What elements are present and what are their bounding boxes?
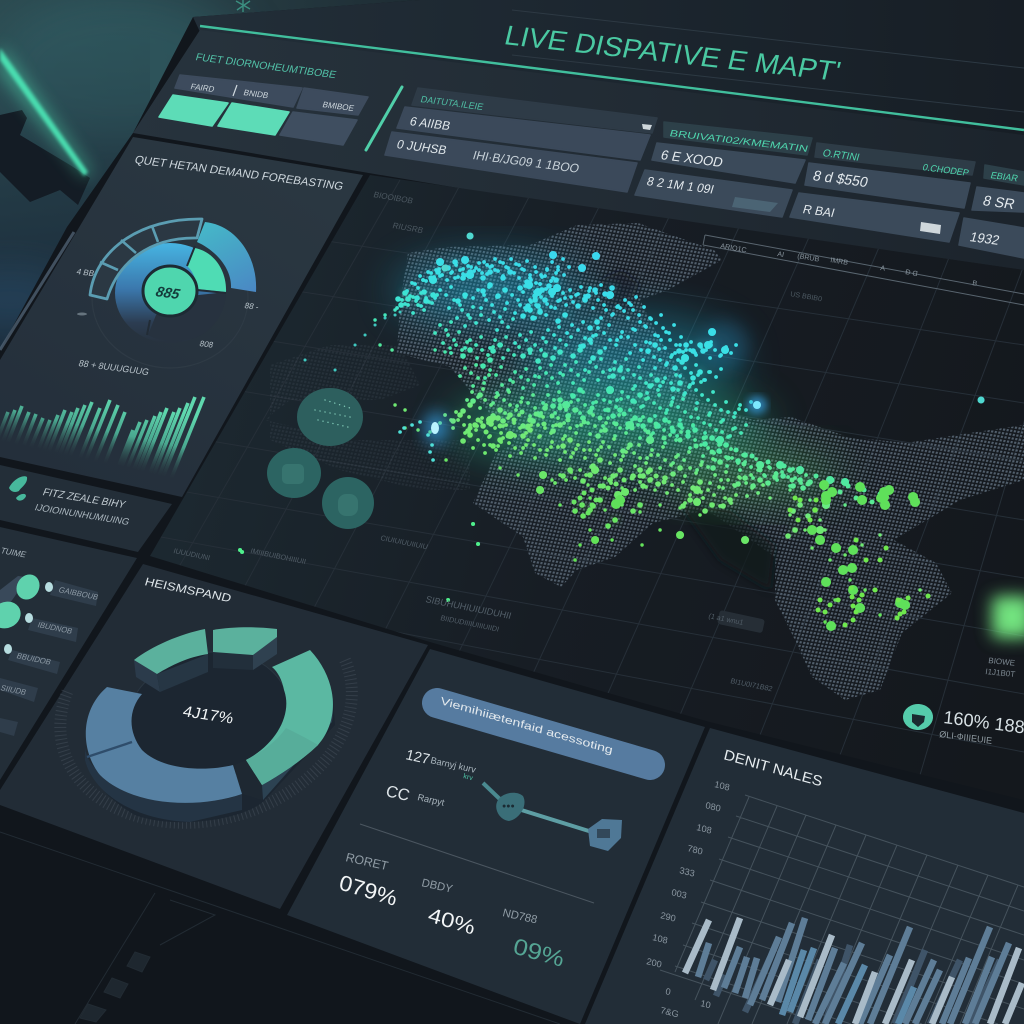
- panel heading: QUET HETAN DEMAND FOREBASTING: [133, 154, 345, 193]
- panel: small alert: [0, 465, 172, 552]
- y axis labels: 333: [679, 865, 696, 879]
- route connector: krv: [463, 772, 474, 782]
- scatter of dispatch points: [240, 236, 981, 626]
- gauge chart: 88 + 8UUUGUUG: [77, 358, 150, 377]
- lower floor network: [0, 832, 560, 1024]
- donut chart: [60, 627, 352, 823]
- metric: roret: [337, 850, 400, 911]
- data card grid: O.RTINI: [821, 148, 861, 164]
- fleet heading: FUET DIORNOHEUMTIBOBE: [194, 52, 337, 81]
- panel: demand forecasting: [0, 137, 363, 497]
- y axis labels: 0: [665, 986, 672, 997]
- gauge chart: 88 -: [243, 301, 260, 312]
- panel: forecasting stats: Viemihiiætenfaid acessoting: [439, 695, 614, 757]
- small card icon: [642, 124, 941, 234]
- fleet tabs: [159, 75, 368, 145]
- dark sea gaps: [600, 270, 775, 590]
- y axis labels: [646, 779, 731, 1019]
- title: LIVE DISPATIVE E MAPT': [502, 19, 844, 87]
- metric: nd7b8: 09%: [511, 933, 567, 972]
- panel: forecasting stats: CC: [384, 782, 412, 805]
- data card grid: 0.CHODEP: [921, 162, 970, 178]
- map footnotes: [172, 533, 774, 693]
- metric: roret: 079%: [337, 870, 400, 911]
- panel: live map: Ð Ɑ: [905, 268, 918, 278]
- panel: live map: RIUSRB: [391, 221, 425, 235]
- map ruler: [703, 235, 1024, 305]
- metric: oddy: DBDY: [420, 877, 454, 896]
- map footnotes: CIUIUIUUIIUIU: [379, 533, 429, 551]
- data card grid: IHI·B/JG09 1 1BOO: [471, 148, 581, 176]
- map footnotes: SIBUHUHIUIUIDUHII: [424, 594, 513, 621]
- panel: live map: [150, 175, 1024, 800]
- bar chart grid: [660, 795, 1024, 1024]
- panel: live map: AI: [777, 250, 785, 259]
- fleet tabs: BMIBOE: [321, 100, 356, 113]
- accent divider: [366, 87, 402, 150]
- gauge chart: 808: [198, 339, 215, 350]
- forecast bar chart: [0, 397, 204, 479]
- panel: live map: (BRUB: [797, 252, 820, 264]
- icon: top star mark: [236, 0, 250, 12]
- panel: small alert: IJOIOINUNHUMIUING: [33, 501, 131, 527]
- data card grid: 6 AIIBB: [408, 114, 452, 133]
- gauge chart: [75, 219, 260, 377]
- y axis labels: 10: [700, 998, 712, 1010]
- y axis labels: 200: [646, 956, 663, 970]
- y axis labels: 108: [652, 932, 669, 946]
- pill banner: [437, 703, 650, 765]
- panel: forecasting stats: Rarpyt: [417, 792, 446, 808]
- panel: live map: ARIO1C: [720, 242, 747, 254]
- data card grid: BRUIVATI02/KMEMATIN: [668, 128, 809, 154]
- right status block: ØLI-ФIIIEUIE: [939, 729, 993, 746]
- panel: legend list: SIIUDB: [0, 683, 28, 697]
- dense green ridge: [470, 408, 880, 513]
- divider: [360, 824, 594, 903]
- data card grid: DAITUTA.ILEIE: [419, 94, 485, 112]
- route connector: ●●●: [502, 803, 515, 810]
- y axis labels: 080: [705, 800, 722, 814]
- data glow: [395, 258, 840, 500]
- fleet tabs: BNIDB: [242, 88, 270, 100]
- silhouette landscape: [0, 110, 90, 205]
- lens markers: [267, 388, 374, 529]
- panel heading: HEISMSPAND: [143, 576, 233, 605]
- metric: nd7b8: [501, 907, 567, 972]
- y axis labels: 108: [714, 779, 731, 793]
- outlier dots: [445, 236, 981, 400]
- panel: legend list: IBUDNOB: [36, 620, 74, 636]
- panel: donut share: [0, 564, 428, 909]
- dotted land masses: [397, 223, 1024, 700]
- panel: legend list: [0, 527, 137, 780]
- panel heading: DENIT NALES: [722, 747, 824, 790]
- right status block: BIOWE: [988, 656, 1016, 668]
- panel: live map: B: [972, 279, 978, 288]
- panel: demand bars: [585, 728, 1024, 1024]
- map footnotes: (1 a1 wnu1: [707, 611, 745, 627]
- map grid: [150, 180, 1024, 775]
- header strip with title: [193, 0, 1024, 135]
- panel: live map: IMRB: [830, 256, 849, 267]
- panel: forecasting stats: Barnyj kurv: [430, 755, 477, 775]
- faint western land: [265, 345, 470, 490]
- panel: legend list: BBUIDOB: [15, 651, 52, 667]
- y axis labels: 7&G: [660, 1005, 680, 1019]
- fleet tabs: FAIRD: [189, 82, 216, 94]
- top control panel: [133, 26, 1024, 270]
- map footnotes: IUUUDIUNI: [172, 546, 211, 562]
- route connector: [463, 772, 622, 851]
- panel: legend list: GAIBBOUB: [57, 585, 100, 602]
- route rows: 127: [404, 747, 431, 768]
- metric: roret: RORET: [344, 850, 390, 873]
- metric: oddy: 40%: [426, 904, 477, 940]
- y axis labels: 780: [687, 843, 704, 857]
- icon: status badge: [903, 704, 933, 730]
- right status block: 160% 188: [943, 707, 1024, 738]
- y axis labels: 290: [660, 910, 677, 924]
- left side line: [0, 232, 74, 350]
- panel: live map: A: [880, 264, 886, 273]
- data card grid: EBIAR: [989, 170, 1020, 183]
- gauge chart: 885: [154, 284, 182, 303]
- data card grid: 8 2 1M 1 09I: [645, 174, 716, 197]
- icon: blob: [9, 476, 27, 501]
- data card grid: 8 d $550: [811, 168, 870, 191]
- metric: oddy: [420, 877, 477, 940]
- panel: live map: BIOOIBOB: [372, 190, 415, 206]
- panel: small alert: FITZ ZEALE BIHY: [41, 487, 127, 511]
- metric: nd7b8: ND788: [501, 907, 538, 926]
- data card grid: 6 E XOOD: [659, 147, 725, 170]
- bars: [685, 918, 1022, 1024]
- data card grid: 8 SR: [981, 193, 1017, 213]
- right status block: [903, 596, 1024, 746]
- gauge chart: 4 BB: [75, 267, 96, 278]
- map footnotes: BI1U0I71B82: [729, 676, 774, 693]
- green light beam: [0, 44, 92, 178]
- data card grid: [385, 88, 1024, 258]
- right status block: I1J1B0T: [985, 667, 1016, 679]
- donut centre value: 4J17%: [181, 703, 236, 727]
- panel: live map: US BBIB0: [790, 290, 823, 303]
- y axis labels: 108: [696, 822, 713, 836]
- map footnotes: BIIDUDIIIIUIIIUIIDI: [439, 613, 500, 634]
- map footnotes: IMIIIBUIBOHIIIUII: [249, 546, 307, 566]
- panel: forecasting stats: [287, 649, 705, 1024]
- bright node: [400, 396, 767, 460]
- data card grid: 0 JUHSB: [395, 137, 448, 157]
- data card grid: 1932: [968, 229, 1001, 248]
- panel: legend list: TUIME: [0, 545, 28, 559]
- data card grid: R BAI: [801, 202, 837, 220]
- y axis labels: 003: [671, 887, 688, 901]
